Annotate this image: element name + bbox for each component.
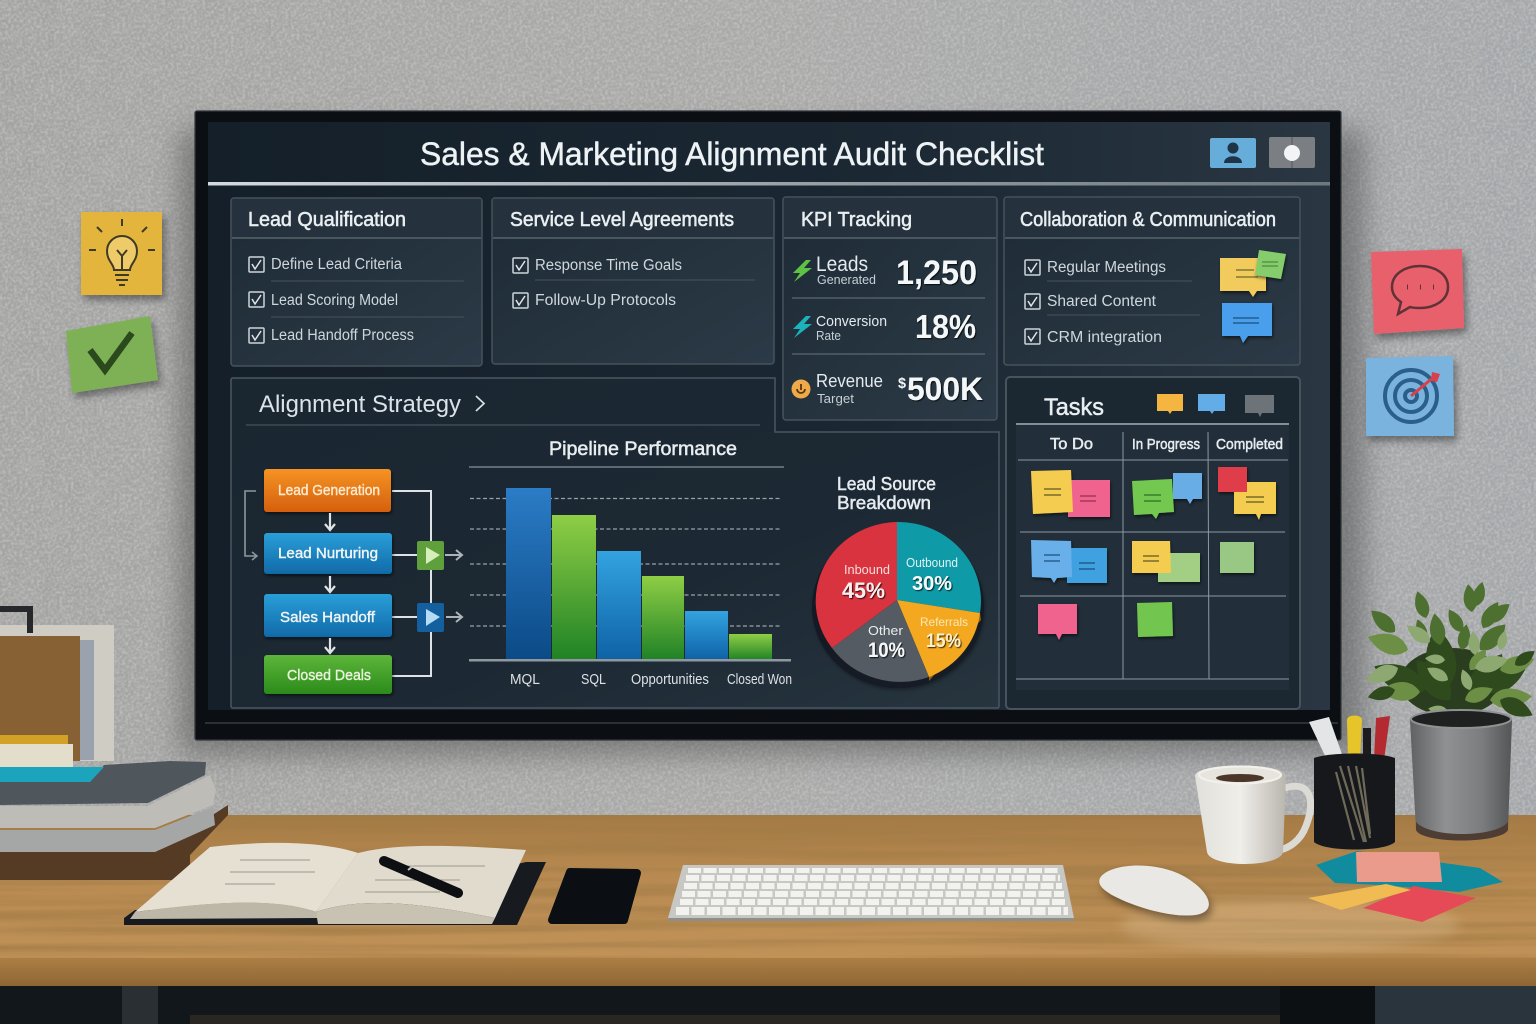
checklist: collaboration: Regular Meetings	[1047, 259, 1166, 276]
heading: service level agreements: Service Level Agreements	[510, 209, 734, 231]
slice: inbound	[816, 522, 897, 648]
desk surface	[0, 815, 1536, 1024]
KPI: revenue target: Target	[817, 391, 854, 406]
checklist: service level agreements: Follow-Up Protocols	[535, 292, 676, 309]
monitor screen	[208, 122, 1330, 710]
panel: service level agreements	[492, 198, 774, 364]
heading: KPI tracking: KPI Tracking	[801, 209, 912, 231]
header divider	[208, 182, 1330, 186]
panel: alignment strategy and pipeline	[231, 378, 999, 708]
title: Sales & Marketing Alignment Audit Checklist	[420, 136, 1044, 172]
in progress note row 3	[1137, 602, 1173, 637]
wall monitor	[195, 111, 1341, 740]
icon: blue note	[1198, 394, 1225, 414]
icon: orange note	[1157, 394, 1183, 414]
sticky note: chat	[1371, 249, 1464, 334]
KPI: conversion rate	[793, 308, 976, 345]
icon: lightbulb	[89, 219, 155, 285]
pie labels: 15%	[926, 631, 961, 652]
column headers: To Do	[1050, 436, 1093, 453]
pie labels: Other	[868, 623, 904, 638]
sticky note: check mark	[66, 316, 158, 393]
KPI: revenue target	[792, 371, 983, 407]
sticky note: lightbulb	[81, 212, 162, 295]
arrow: handoff to closed	[325, 638, 335, 653]
heading: lead qualification: Lead Qualification	[248, 209, 406, 231]
panel: lead qualification	[231, 198, 482, 366]
icon: yellow chat note	[1220, 258, 1266, 297]
arrow: nurturing to handoff	[325, 576, 335, 592]
in progress notes row 2	[1132, 541, 1200, 582]
heading: collaboration and communication: Collaboration & Communication	[1020, 209, 1276, 231]
KPI: revenue target: $	[898, 375, 907, 392]
checklist: collaboration	[1025, 259, 1200, 346]
mouse	[1099, 866, 1209, 915]
arrow: to chart top	[445, 550, 462, 560]
pie chart: lead source breakdown	[812, 474, 984, 688]
completed note row 2	[1220, 542, 1254, 573]
arrow: generation to nurturing	[325, 513, 335, 530]
step: sales handoff: Sales Handoff	[280, 609, 376, 626]
KPI: conversion rate: Conversion	[816, 313, 887, 330]
heading: pipeline performance: Pipeline Performance	[549, 439, 737, 460]
in progress notes row 1	[1132, 473, 1202, 519]
KPI: leads generated: 1,250	[896, 254, 977, 292]
step: lead nurturing	[264, 533, 392, 574]
icon: check mark	[90, 333, 132, 370]
slice: other	[832, 600, 929, 682]
slice: outbound	[897, 522, 981, 613]
axis labels: SQL	[581, 672, 606, 688]
checklist: collaboration: Shared Content	[1047, 293, 1157, 310]
desk sticky notes	[1308, 851, 1503, 922]
coffee mug	[1195, 766, 1311, 864]
pot	[1410, 711, 1512, 840]
panel: collaboration and communication	[1004, 197, 1300, 365]
axis labels: Closed Won	[727, 672, 792, 688]
pie labels: Inbound	[844, 562, 890, 577]
icon: target	[1385, 370, 1440, 422]
icon: chat bubble	[1392, 266, 1448, 314]
bar chart: pipeline performance	[469, 439, 792, 688]
column headers	[1050, 436, 1283, 453]
checklist: service level agreements: Response Time Goals	[535, 257, 682, 274]
KPI: revenue target: 500K	[907, 371, 983, 407]
slice: referrals	[897, 600, 980, 677]
icon: gray note	[1245, 395, 1274, 417]
pie labels: 45%	[842, 578, 885, 603]
heading: alignment strategy	[246, 391, 760, 425]
heading: alignment strategy: Alignment Strategy	[259, 391, 461, 418]
potted plant	[1363, 581, 1536, 840]
axis labels	[510, 672, 792, 688]
pie labels: Outbound	[906, 555, 958, 570]
book stack	[0, 761, 228, 880]
icon: toggle button	[1269, 137, 1315, 168]
checklist: lead qualification: Lead Scoring Model	[271, 292, 398, 309]
icon: blue play gate	[417, 603, 444, 632]
checklist: lead qualification	[249, 256, 464, 344]
pie labels: Referrals	[920, 615, 968, 629]
heading: lead source breakdown	[837, 474, 936, 513]
step: closed deals	[264, 655, 392, 694]
heading: lead source breakdown: Lead Source	[837, 474, 936, 494]
checklist: lead qualification: Lead Handoff Process	[271, 327, 414, 344]
checklist: collaboration: CRM integration	[1047, 329, 1162, 346]
smartphone	[552, 872, 637, 920]
checklist: service level agreements	[513, 257, 755, 309]
arrow: to chart bottom	[446, 612, 462, 622]
completed notes row 1	[1218, 467, 1276, 520]
panel: KPI tracking	[783, 197, 997, 420]
pie labels: 10%	[868, 639, 905, 662]
axis labels: Opportunities	[631, 672, 709, 688]
foliage	[1363, 581, 1536, 723]
arrow: feedback loop	[245, 491, 257, 560]
to do notes row 1	[1031, 470, 1110, 517]
icon: user button	[1210, 138, 1256, 168]
icon: green note	[1255, 250, 1286, 279]
to do notes row 2	[1031, 540, 1107, 583]
KPI: revenue target: Revenue	[816, 371, 883, 391]
step: closed deals: Closed Deals	[287, 667, 371, 684]
panel: tasks kanban	[1006, 377, 1300, 709]
flow diagram	[245, 469, 462, 694]
KPI: conversion rate: Rate	[816, 329, 841, 343]
axis labels: MQL	[510, 672, 540, 688]
column headers: In Progress	[1132, 437, 1200, 453]
binders on shelf	[0, 606, 114, 767]
monitor frame	[195, 111, 1341, 740]
step: sales handoff	[264, 594, 392, 637]
KPI: leads generated	[793, 253, 977, 292]
KPI: conversion rate: 18%	[915, 308, 976, 345]
KPI: leads generated: Generated	[817, 273, 876, 287]
pie labels: 30%	[912, 573, 952, 595]
step: lead generation	[264, 469, 391, 512]
notebook with pen	[124, 843, 546, 925]
to do note row 3	[1038, 604, 1077, 640]
icon: blue chat note	[1222, 303, 1272, 343]
heading: lead source breakdown: Breakdown	[837, 493, 931, 513]
heading: tasks: Tasks	[1044, 394, 1104, 421]
connector lines	[392, 491, 431, 676]
pie labels	[842, 555, 968, 662]
keyboard	[668, 865, 1074, 921]
step: lead nurturing: Lead Nurturing	[278, 545, 378, 562]
pen holder	[1309, 716, 1395, 850]
column headers: Completed	[1216, 437, 1283, 453]
icon: green play gate	[417, 541, 444, 570]
sticky note: target	[1366, 356, 1454, 436]
step: lead generation: Lead Generation	[278, 482, 380, 499]
KPI: leads generated: Leads	[816, 253, 868, 276]
checklist: lead qualification: Define Lead Criteria	[271, 256, 402, 273]
